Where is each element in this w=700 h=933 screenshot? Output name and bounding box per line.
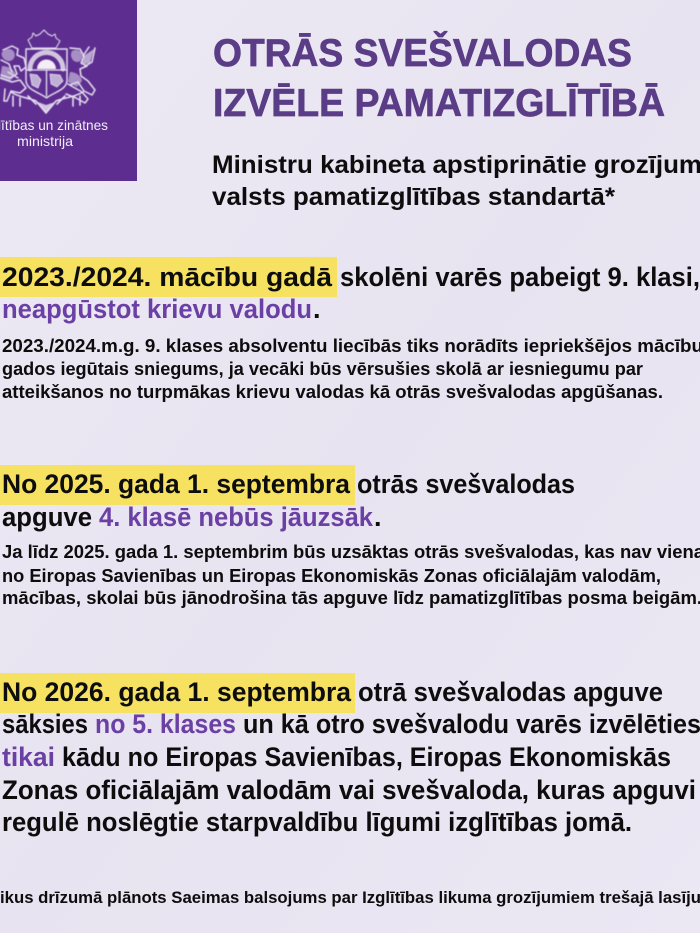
heading: 2026: kādu no Eiropas Savienības, Eiropas Ekonomiskās [62, 742, 671, 772]
section: 2026 [0, 673, 700, 837]
heading: 2025: otrās svešvalodas [357, 469, 575, 499]
heading: 2023/2024 [2, 262, 700, 324]
subtitle [212, 151, 700, 211]
section: 2023/2024 [0, 257, 700, 402]
highlight: 2025 [0, 465, 355, 505]
heading: 2026: tikai [2, 742, 55, 772]
ministry name [0, 117, 108, 149]
icon: coat of arms [0, 30, 95, 113]
heading: 2026: sāksies [2, 709, 88, 739]
heading: 2026: otrā svešvalodas apguve [358, 677, 663, 707]
section: 2025 [0, 465, 700, 608]
body text: 2023/2024: gados iegūtais sniegums, ja vecāki būs vērsušies skolā ar iesniegumu par [2, 358, 643, 379]
heading: 2026: regulē noslēgtie starpvaldību līgumi izglītības jomā. [2, 807, 632, 837]
heading: 2026: No 2026. gada 1. septembra [2, 677, 352, 707]
title [213, 30, 665, 125]
body text: 2025: Ja līdz 2025. gada 1. septembrim būs uzsāktas otrās svešvalodas, kas nav viena [2, 541, 700, 562]
heading: 2023/2024: neapgūstot krievu valodu [2, 294, 312, 324]
heading: 2026: no 5. klases [95, 709, 236, 739]
heading: 2023/2024: 2023./2024. mācību gadā [2, 262, 333, 292]
heading: 2026 [2, 677, 700, 837]
body text: 2025 [2, 541, 700, 608]
ministry name: ministrija [17, 133, 73, 149]
title: IZVĒLE PAMATIZGLĪTĪBĀ [213, 82, 665, 125]
heading: 2025: . [374, 502, 382, 532]
heading: 2025: apguve [2, 502, 92, 532]
title: OTRĀS SVEŠVALODAS [213, 30, 632, 75]
highlight: 2023/2024 [0, 257, 337, 297]
panel: ministry logo [0, 0, 137, 181]
footnote: ikus drīzumā plānots Saeimas balsojums par Izglītības likuma grozījumiem trešajā lasīju [0, 889, 700, 907]
body text: 2023/2024: atteikšanos no turpmākas krievu valodas kā otrās svešvalodas apgūšanas. [2, 381, 663, 402]
subtitle: Ministru kabineta apstiprinātie grozījum [212, 151, 700, 179]
heading: 2023/2024: . [313, 294, 321, 324]
heading: 2025 [2, 469, 575, 532]
heading: 2025: 4. klasē nebūs jāuzsāk [99, 502, 374, 532]
body text: 2023/2024 [2, 335, 700, 402]
body text: 2025: no Eiropas Savienības un Eiropas Ekonomiskās Zonas oficiālajām valodām, [2, 565, 661, 586]
body text: 2023/2024: 2023./2024.m.g. 9. klases absolventu liecībās tiks norādīts iepriekšējos mācību [2, 335, 700, 356]
heading: 2025: No 2025. gada 1. septembra [2, 469, 351, 499]
subtitle: valsts pamatizglītības standartā* [212, 183, 615, 211]
highlight: 2026 [0, 673, 355, 713]
ministry name: lītības un zinātnes [0, 117, 108, 133]
body text: 2025: mācības, skolai būs jānodrošina tās apguve līdz pamatizglītības posma beigām. [2, 587, 700, 608]
